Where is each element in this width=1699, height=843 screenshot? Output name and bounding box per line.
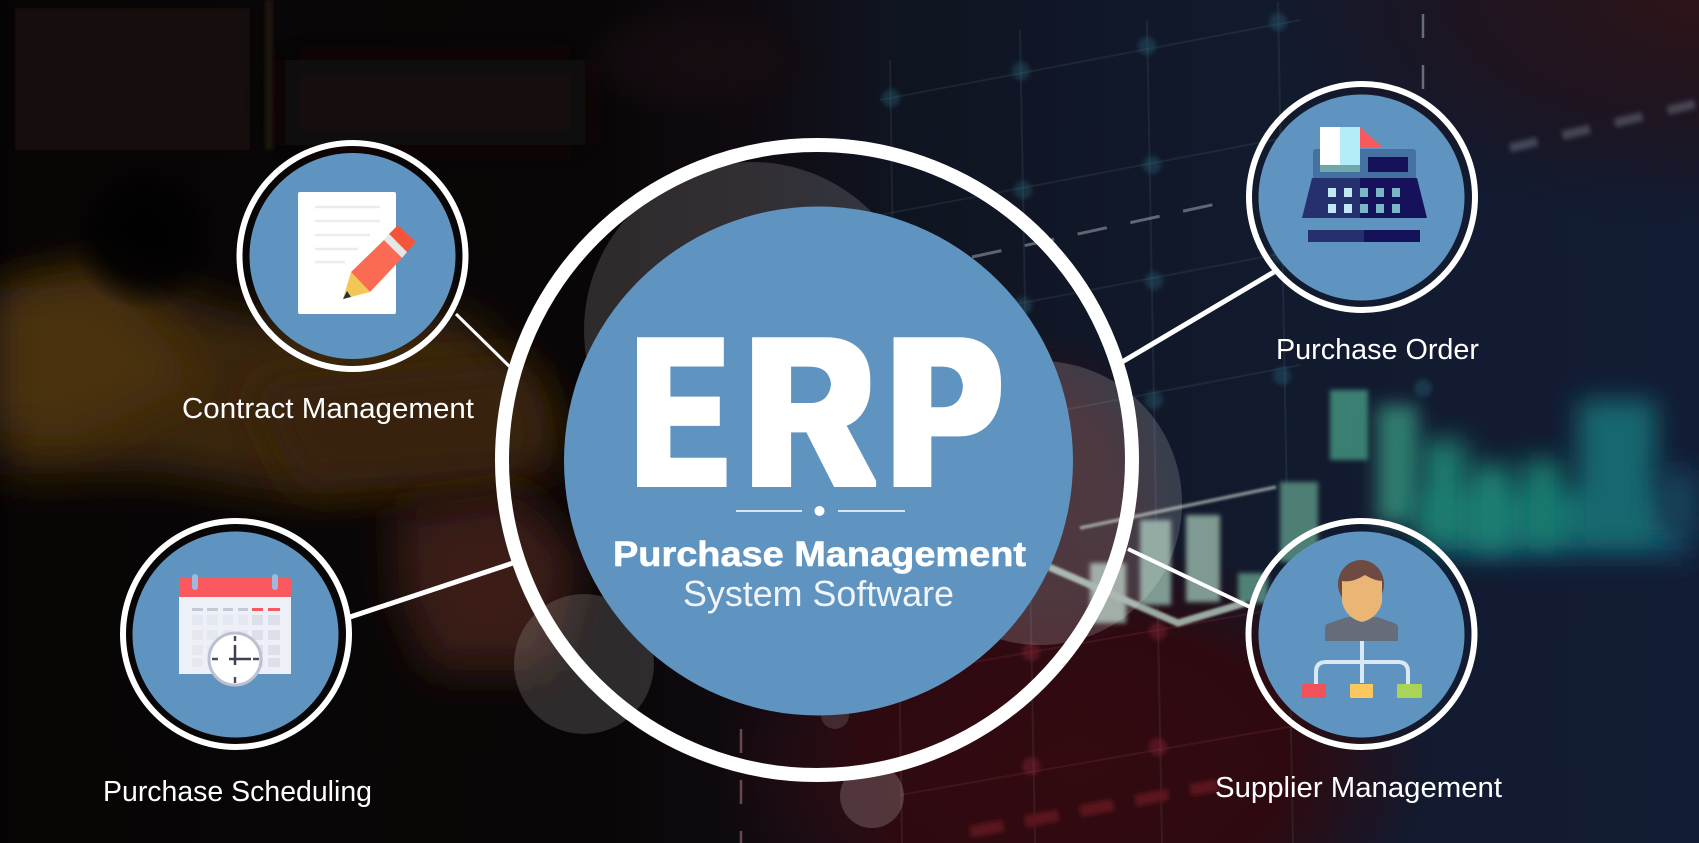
central ERP badge xyxy=(502,145,1132,775)
divider with dot xyxy=(736,506,905,516)
ring xyxy=(123,521,349,747)
label: Purchase Scheduling xyxy=(103,776,372,808)
icon: document and pencil xyxy=(298,192,416,314)
ring xyxy=(1249,84,1475,310)
icon: supervisor and org tree xyxy=(1302,560,1422,698)
node: purchase scheduling xyxy=(103,521,372,808)
blue disc xyxy=(1258,532,1464,738)
ring xyxy=(240,143,466,369)
blue disc xyxy=(250,153,456,359)
connector: contract management xyxy=(456,314,510,367)
label: Supplier Management xyxy=(1215,772,1502,804)
blue disc xyxy=(1258,94,1464,300)
icon: cash register xyxy=(1302,127,1427,242)
connector: purchase scheduling xyxy=(350,563,513,617)
node: supplier management xyxy=(1215,521,1502,804)
translucent bokeh circles xyxy=(514,162,1182,828)
ERP heading: P xyxy=(890,295,1000,528)
node: contract management xyxy=(182,143,474,425)
ERP heading: R xyxy=(748,295,873,529)
connector: supplier management xyxy=(1128,549,1250,607)
connector: purchase order xyxy=(1122,272,1274,362)
subtitle regular: System Software xyxy=(683,573,954,614)
blue disc xyxy=(564,206,1073,716)
label: Contract Management xyxy=(182,393,474,425)
icon: calendar and clock xyxy=(179,574,291,685)
ERP heading: E xyxy=(635,296,725,529)
blue disc xyxy=(132,532,338,738)
outer white ring xyxy=(502,145,1132,775)
ERP heading xyxy=(635,295,1000,529)
subtitle bold: Purchase Management xyxy=(613,535,1026,574)
ring xyxy=(1248,521,1474,747)
label: Purchase Order xyxy=(1276,334,1479,366)
node: purchase order xyxy=(1249,84,1479,366)
